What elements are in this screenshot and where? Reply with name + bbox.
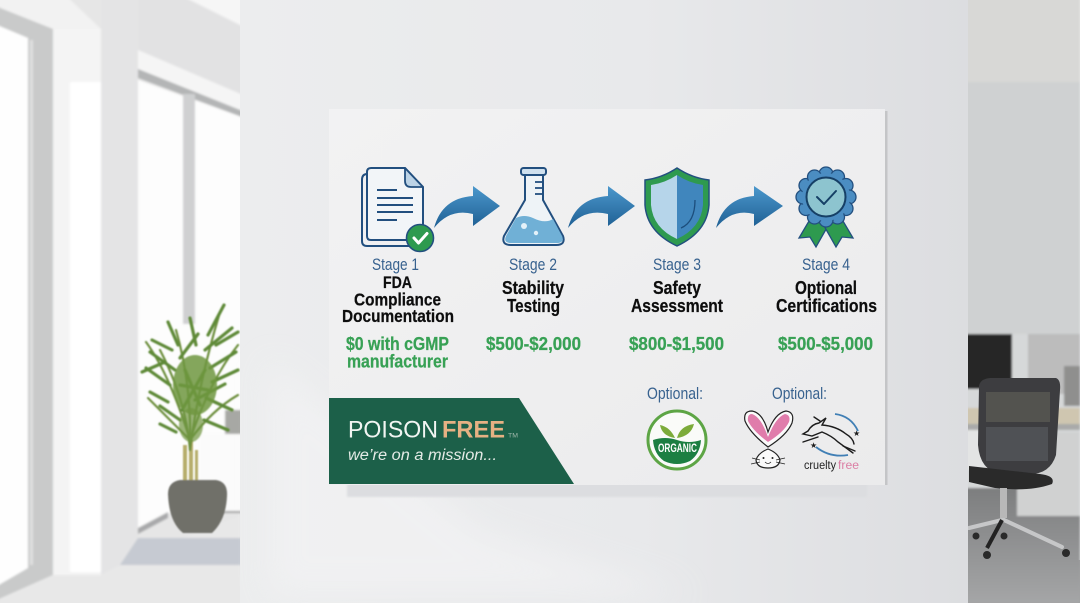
white wall	[240, 0, 968, 603]
stage 3 text: $800-$1,500	[629, 333, 724, 354]
stage 3 text: Safety	[653, 277, 702, 298]
stage 1 text: FDA	[383, 274, 412, 292]
stage 4 text: Stage 4	[802, 256, 850, 274]
icon: organic badge	[648, 411, 706, 469]
stage 3 text: Stage 3	[653, 256, 701, 274]
icon: leaping bunny: cruelty	[804, 460, 836, 472]
icon: shield	[645, 168, 709, 246]
right room with desk and chair	[960, 0, 1080, 603]
arrow: stage 3 to 4	[716, 186, 783, 228]
stage 2 text: Stability	[502, 277, 565, 298]
stage 1 text: Documentation	[342, 306, 454, 326]
stage 2 text: $500-$2,000	[486, 333, 581, 354]
stage 2 text: Testing	[507, 295, 560, 316]
icon: leaping bunny: ★	[853, 429, 860, 438]
floor base under the left room	[0, 560, 240, 603]
icon: leaping bunny: free	[838, 460, 859, 472]
stage 1 text: $0 with cGMP	[346, 333, 449, 354]
optional label: cruelty free: Optional:	[772, 385, 827, 403]
stage 2 text: Stage 2	[509, 256, 557, 274]
left room with windows and plant	[0, 0, 250, 603]
floor base under the right room	[968, 560, 1080, 603]
stage 3 text	[629, 256, 724, 354]
icon: organic badge: ORGANIC	[658, 441, 697, 455]
icon: flask	[503, 168, 564, 245]
stage 3 text: Assessment	[631, 295, 723, 316]
stage 4 text: Certifications	[776, 295, 877, 316]
icon: leaping bunny: ★	[810, 441, 817, 450]
banner: PoisonFree logo: FREE	[442, 416, 505, 444]
banner: PoisonFree logo: we’re on a mission...	[348, 447, 497, 464]
banner: PoisonFree logo: TM	[508, 432, 518, 440]
stage 1 text: Compliance	[354, 290, 441, 310]
arrow: stage 2 to 3	[568, 186, 635, 228]
stage 1 text: manufacturer	[347, 350, 448, 372]
stage 4 text: $500-$5,000	[778, 333, 873, 354]
stage 4 text	[776, 256, 877, 354]
icon: leaping bunny	[803, 414, 860, 472]
icon: pink bunny	[745, 411, 793, 468]
sign shadow	[347, 472, 867, 497]
arrow: stage 1 to 2	[434, 186, 500, 228]
sign board	[329, 109, 885, 485]
office chair	[969, 378, 1070, 559]
icon: document with green check	[362, 168, 434, 252]
stage 4 text: Optional	[795, 277, 857, 298]
icon: award rosette	[796, 167, 856, 247]
banner: PoisonFree logo	[329, 398, 574, 484]
banner: PoisonFree logo: POISON	[348, 416, 438, 444]
potted plant	[142, 305, 238, 533]
stage 2 text	[486, 256, 581, 354]
stage 1 text: Stage 1	[372, 256, 419, 274]
stage 1 text	[342, 256, 454, 372]
optional label: organic: Optional:	[647, 385, 703, 403]
